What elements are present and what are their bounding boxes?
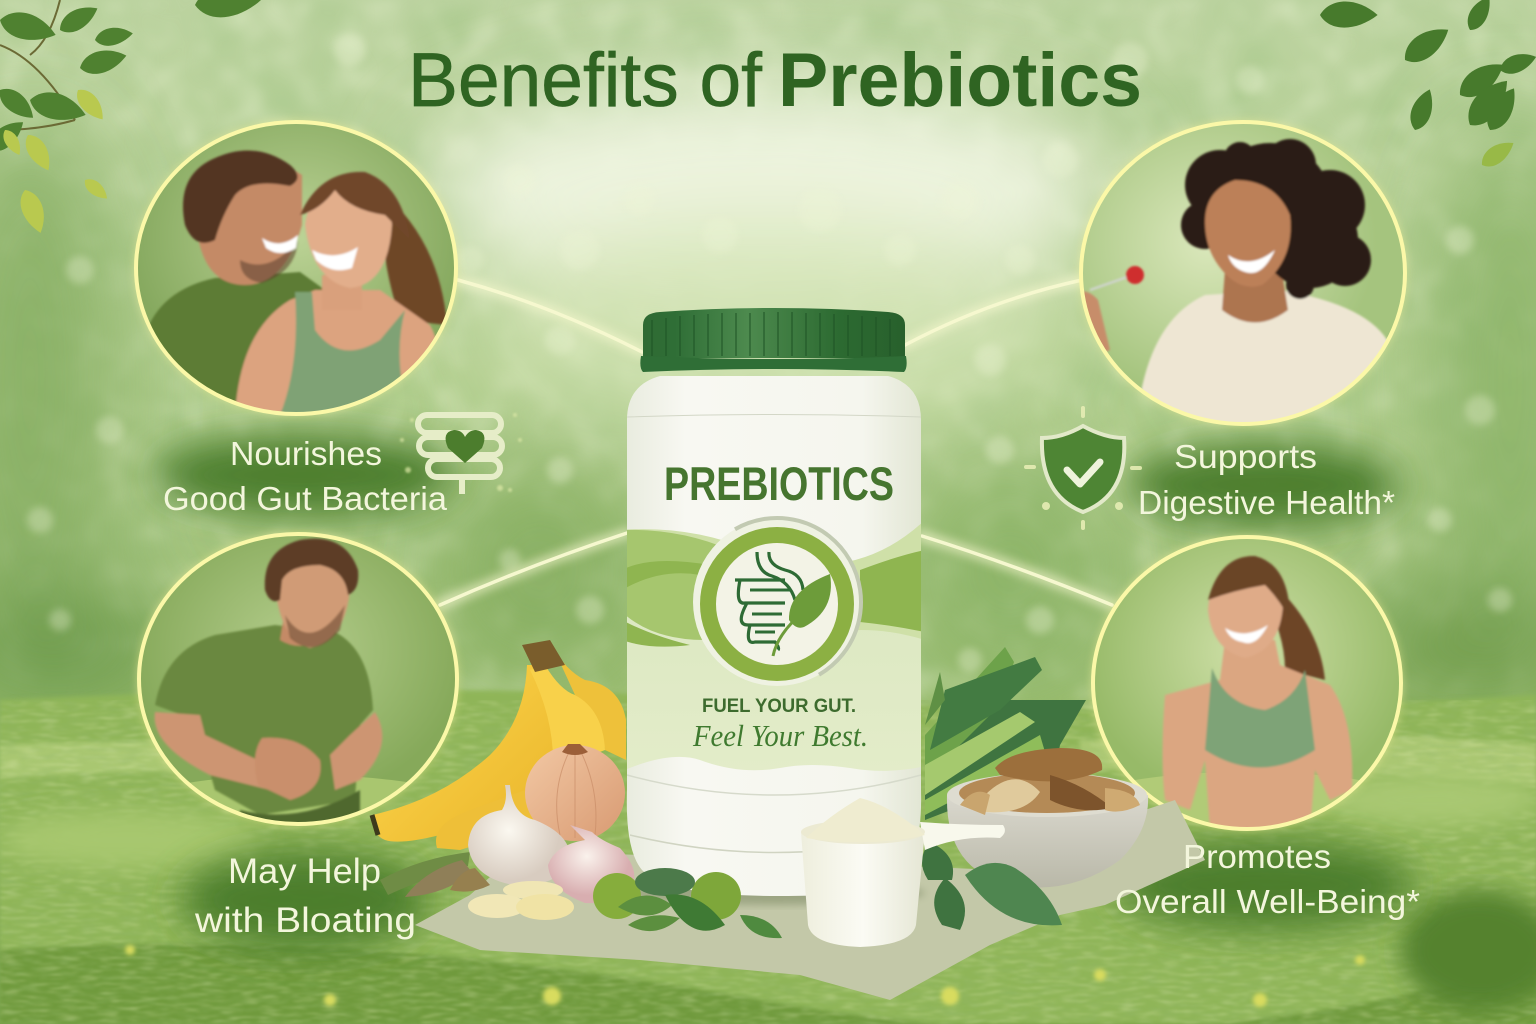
icon: shield with check — [1024, 406, 1142, 530]
label: promotes overall well-being — [1115, 838, 1420, 920]
photo circle: woman eating — [1068, 118, 1410, 430]
food: asparagus — [380, 852, 490, 897]
food: bananas — [372, 640, 626, 850]
jar script tagline: Feel Your Best. — [692, 718, 868, 753]
title: Benefits of — [408, 38, 763, 123]
corner foliage: top left — [0, 0, 263, 236]
jar cap — [640, 308, 907, 372]
photo circle: man with bloating — [130, 530, 465, 835]
food: garlic bulbs — [468, 785, 634, 920]
jar tagline: FUEL YOUR GUT. — [702, 696, 856, 717]
label backdrops — [155, 433, 1415, 950]
product jar — [620, 308, 930, 905]
label: supports digestive health — [1138, 438, 1395, 521]
title: Prebiotics — [778, 38, 1142, 123]
label: nourishes good gut bacteria — [163, 435, 448, 517]
jar brand text: PREBIOTICS — [664, 457, 894, 510]
food: green fruits and leaves — [593, 868, 782, 938]
jar shadow — [625, 881, 925, 905]
food: onion — [525, 744, 625, 841]
gut and leaf logo — [693, 487, 892, 686]
connector lines — [440, 280, 1112, 605]
label: may help with bloating — [194, 852, 416, 940]
title — [408, 38, 1142, 123]
grass — [0, 690, 1536, 1024]
corner foliage: top right — [1320, 0, 1536, 172]
label: nourishes good gut bacteria: Nourishes — [230, 435, 382, 472]
icon: gut with heart — [400, 413, 522, 494]
label: supports digestive health: Supports — [1174, 438, 1317, 475]
food: bowl of chips — [947, 748, 1148, 888]
food: leeks — [925, 647, 1086, 820]
photo circle: woman meditating — [1085, 530, 1410, 835]
label: promotes overall well-being: Overall Well-Being* — [1115, 883, 1420, 920]
label: may help with bloating: May Help — [228, 852, 381, 891]
food: spinach leaves — [922, 842, 1062, 930]
photo circle: happy couple — [130, 115, 465, 420]
label: may help with bloating: with Bloating — [194, 901, 416, 940]
label: supports digestive health: Digestive Health* — [1138, 484, 1395, 521]
label: nourishes good gut bacteria: Good Gut Bacteria — [163, 480, 448, 517]
cloth mat — [415, 800, 1205, 1000]
label: promotes overall well-being: Promotes — [1183, 838, 1331, 875]
food: measuring scoop with powder — [801, 798, 1005, 947]
jar body — [627, 376, 921, 896]
